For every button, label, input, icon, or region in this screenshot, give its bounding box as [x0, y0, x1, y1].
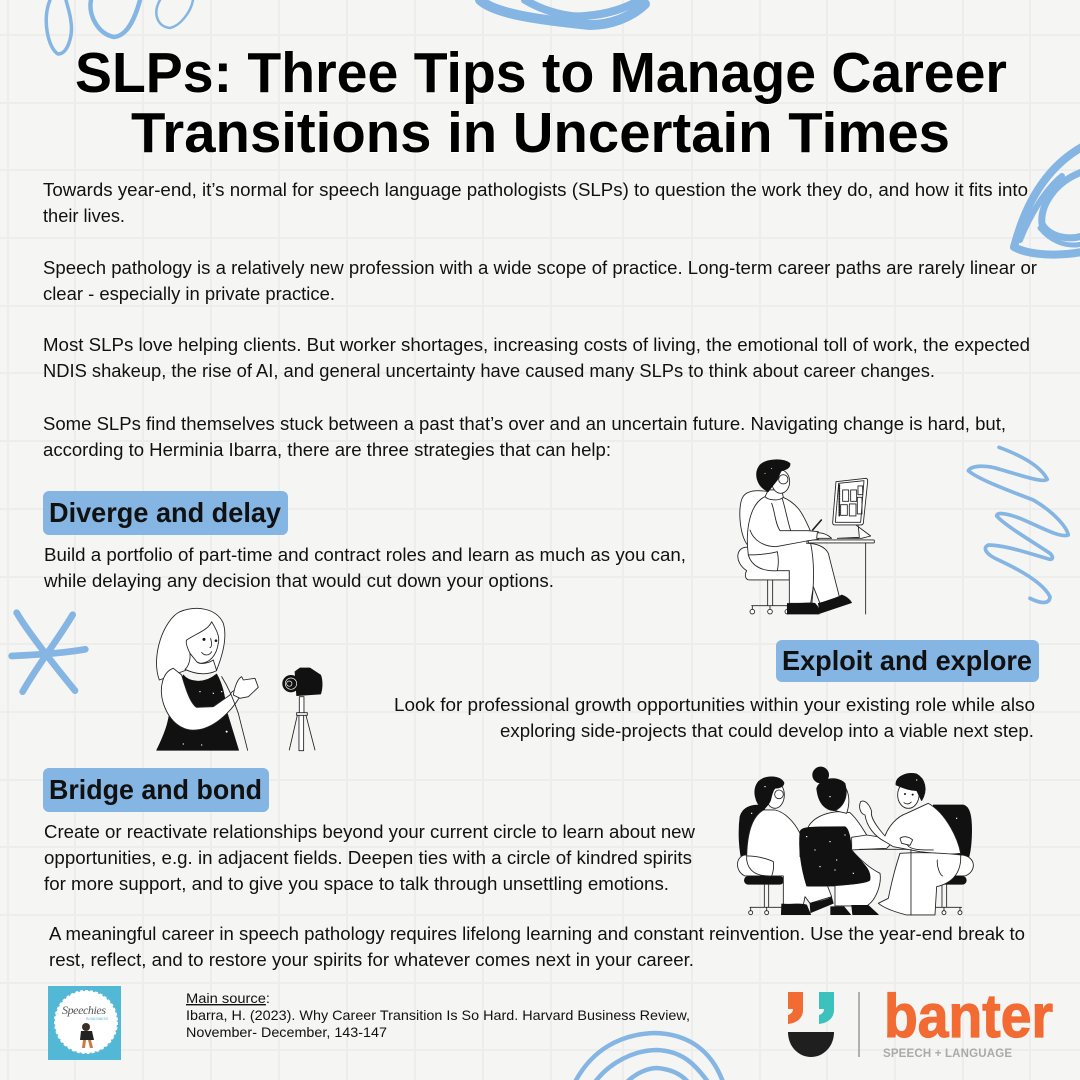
closing text: rest, reflect, and to restore your spirits for whatever comes next in your career. [49, 949, 694, 970]
text: Bridge and bond: opportunities, e.g. in adjacent fields. Deepen ties with a circle of kindred spirits [44, 847, 692, 868]
intro text: Some SLPs find themselves stuck between a past that’s over and an uncertain future. Navigating change is hard, but, [43, 413, 1006, 434]
logo: banter speech + language: SPEECH + LANGUAGE [883, 1048, 1012, 1060]
text: Diverge and delay: while delaying any decision that would cut down your options. [43, 570, 554, 591]
intro text: clear - especially in private practice. [43, 283, 335, 304]
text: Bridge and bond: for more support, and to give you space to talk through unsettling emotions. [44, 873, 669, 894]
title [75, 41, 1007, 165]
logo: Speechies in Business: Speechies [62, 1003, 106, 1017]
intro text [43, 179, 1037, 460]
source citation: November- December, 143-147 [186, 1024, 387, 1040]
scribble: bottom rings [575, 1033, 723, 1080]
text: Bridge and bond [44, 821, 696, 894]
heading: Diverge and delay [43, 491, 288, 535]
heading: Diverge and delay: Diverge and delay [49, 497, 281, 528]
source citation: Main source : [186, 990, 270, 1006]
intro text: their lives. [43, 205, 125, 226]
scribble: top centre [480, 0, 645, 25]
intro text: Most SLPs love helping clients. But worker shortages, increasing costs of living, the emotional toll of work, the expected [43, 334, 1030, 355]
intro text: Towards year-end, it’s normal for speech language pathologists (SLPs) to question the work they do, and how it fits into [43, 179, 1028, 200]
title: SLPs: Three Tips to Manage Career [75, 41, 1007, 105]
intro text: Speech pathology is a relatively new profession with a wide scope of practice. Long-term career paths are rarely linear or [43, 257, 1037, 278]
source citation: Ibarra, H. (2023). Why Career Transition Is So Hard. Harvard Business Review, [186, 1007, 690, 1023]
illustration: person at desk [738, 460, 874, 614]
illustration: three people at a table [737, 767, 973, 915]
heading: Bridge and bond: Bridge and bond [49, 774, 262, 805]
text: Exploit and explore: exploring side-projects that could develop into a viable next step. [500, 720, 1034, 741]
source citation [186, 990, 690, 1040]
text: Diverge and delay [43, 544, 686, 591]
heading: Exploit and explore: Exploit and explore [782, 645, 1032, 676]
scribble: top right [1014, 147, 1080, 255]
logo: Speechies in Business [48, 986, 121, 1060]
scribble: left star [12, 613, 85, 692]
logo: banter speech + language: banter [884, 982, 1053, 1050]
closing text [49, 923, 1025, 970]
intro text: NDIS shakeup, the rise of AI, and general uncertainty have caused many SLPs to think about career changes. [43, 360, 935, 381]
title: Transitions in Uncertain Times [131, 101, 950, 165]
illustration: woman with camera [157, 608, 322, 751]
logo: Speechies in Business: IN BUSINESS [86, 1017, 109, 1021]
text: Diverge and delay: Build a portfolio of part-time and contract roles and learn as much as you can, [44, 544, 686, 565]
scribble: right side zigzag [968, 447, 1068, 602]
text: Bridge and bond: Create or reactivate relationships beyond your current circle to learn about new [44, 821, 696, 842]
intro text: according to Herminia Ibarra, there are three strategies that can help: [43, 439, 611, 460]
heading: Bridge and bond [43, 768, 269, 812]
logo: banter speech + language [788, 982, 1053, 1060]
closing text: A meaningful career in speech pathology requires lifelong learning and constant reinvention. Use the year-end break to [49, 923, 1025, 944]
text: Exploit and explore: Look for professional growth opportunities within your existing role while also [394, 694, 1035, 715]
text: Exploit and explore [394, 694, 1035, 741]
scribble: top left loops [46, 0, 193, 54]
